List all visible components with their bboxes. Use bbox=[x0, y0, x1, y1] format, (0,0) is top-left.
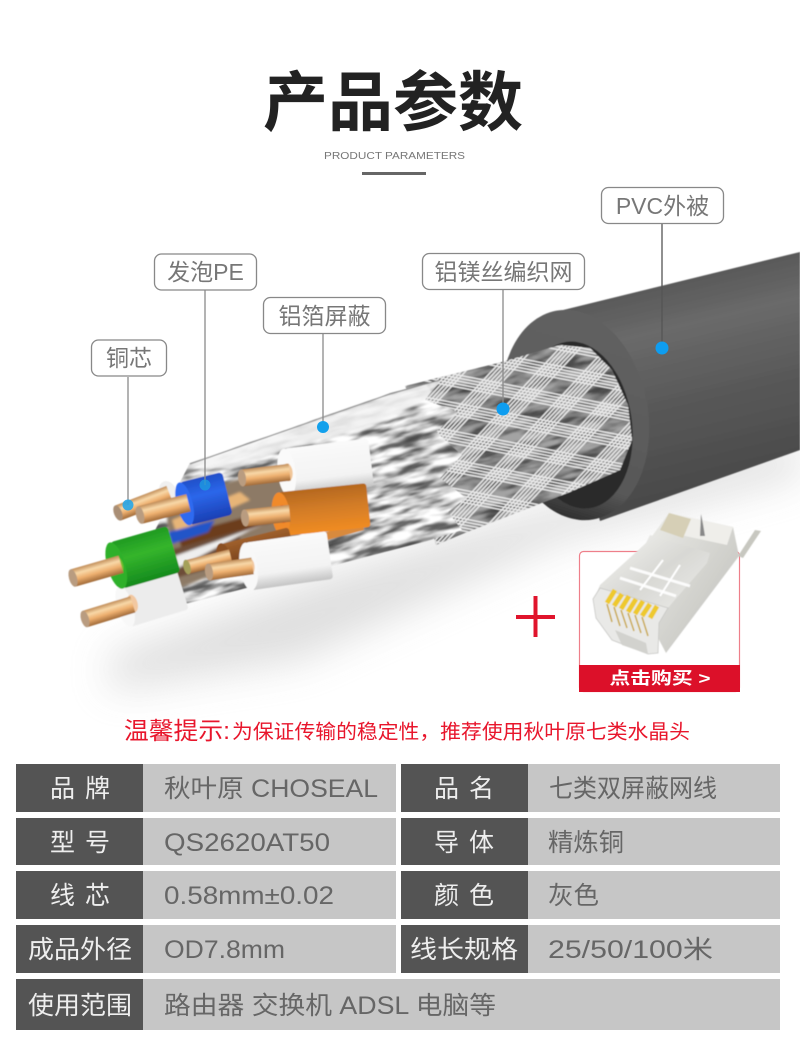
label: copper core bbox=[92, 340, 166, 510]
label: aluminium foil bbox=[264, 298, 386, 433]
wire: white bottom-left bbox=[75, 569, 189, 640]
subtitle: PRODUCT PARAMETERS bbox=[324, 151, 465, 162]
row: diameter and length bbox=[16, 925, 780, 973]
label: PVC jacket bbox=[602, 188, 724, 354]
row: brand and product name: 秋叶原 CHOSEAL bbox=[164, 775, 378, 803]
buy button bbox=[579, 665, 740, 692]
row: diameter and length: 线长规格 bbox=[410, 936, 518, 964]
row: diameter and length: 25/50/100米 bbox=[548, 936, 713, 964]
product frame bbox=[580, 552, 740, 692]
wire: green bbox=[63, 526, 181, 602]
wire: rear copper core bbox=[110, 478, 181, 527]
title underline bbox=[362, 172, 426, 175]
wire: white upper bbox=[235, 438, 374, 502]
plus sign bbox=[516, 596, 555, 637]
row: core and colour: 颜色 bbox=[434, 882, 494, 910]
title: 产品参数 bbox=[263, 66, 523, 139]
wire: orange bbox=[239, 483, 371, 540]
buy box with connector bbox=[579, 513, 761, 692]
label: aluminium foil: 铝箔屏蔽 bbox=[278, 303, 370, 329]
notice text bbox=[124, 718, 690, 745]
row: core and colour bbox=[16, 871, 780, 919]
row: brand and product name: 品名 bbox=[434, 775, 494, 803]
notice text: 为保证传输的稳定性，推荐使用秋叶原七类水晶头 bbox=[232, 720, 690, 744]
RJ45 connector bbox=[593, 513, 761, 654]
spec table bbox=[16, 764, 780, 1030]
buy button: 点击购买 > bbox=[610, 669, 711, 688]
label: copper core: 铜芯 bbox=[106, 345, 152, 371]
row: diameter and length: OD7.8mm bbox=[164, 936, 285, 964]
foil top edge bbox=[190, 380, 440, 464]
row: core and colour: 0.58mm±0.02 bbox=[164, 882, 334, 910]
inner strands bbox=[165, 462, 300, 590]
row: brand and product name: 七类双屏蔽网线 bbox=[549, 775, 717, 803]
row: model and conductor: 导体 bbox=[434, 829, 494, 857]
wire: brown bbox=[180, 526, 296, 583]
gold contacts bbox=[607, 590, 657, 618]
row: model and conductor: 精炼铜 bbox=[548, 829, 624, 857]
label: braided mesh: 铝镁丝编织网 bbox=[434, 259, 572, 285]
braided mesh bbox=[404, 344, 633, 545]
row: model and conductor: QS2620AT50 bbox=[164, 829, 330, 857]
row: core and colour: 线芯 bbox=[50, 882, 110, 910]
label: PVC jacket: PVC外被 bbox=[616, 193, 709, 219]
row: model and conductor bbox=[16, 818, 780, 865]
row: usage bbox=[16, 979, 780, 1030]
wire: white lower bbox=[202, 531, 333, 596]
row: brand and product name: 品牌 bbox=[50, 775, 110, 803]
row: diameter and length: 成品外径 bbox=[28, 936, 132, 964]
row: core and colour: 灰色 bbox=[548, 882, 599, 910]
row: brand and product name bbox=[16, 764, 780, 812]
label: braided mesh bbox=[422, 254, 584, 416]
cable jacket bbox=[485, 252, 800, 532]
background shadow under cable bbox=[110, 440, 800, 690]
label: foamed PE: 发泡PE bbox=[167, 259, 244, 285]
aluminium foil shield bbox=[155, 380, 466, 604]
row: usage: 路由器 交换机 ADSL 电脑等 bbox=[164, 992, 496, 1020]
row: usage: 使用范围 bbox=[28, 992, 132, 1020]
cable illustration bbox=[68, 252, 800, 628]
notice text: 温馨提示: bbox=[124, 718, 230, 745]
wire: blue bbox=[131, 472, 233, 537]
row: model and conductor: 型号 bbox=[50, 829, 110, 857]
label: foamed PE bbox=[154, 254, 256, 490]
wire: orange stripe bbox=[320, 519, 364, 542]
